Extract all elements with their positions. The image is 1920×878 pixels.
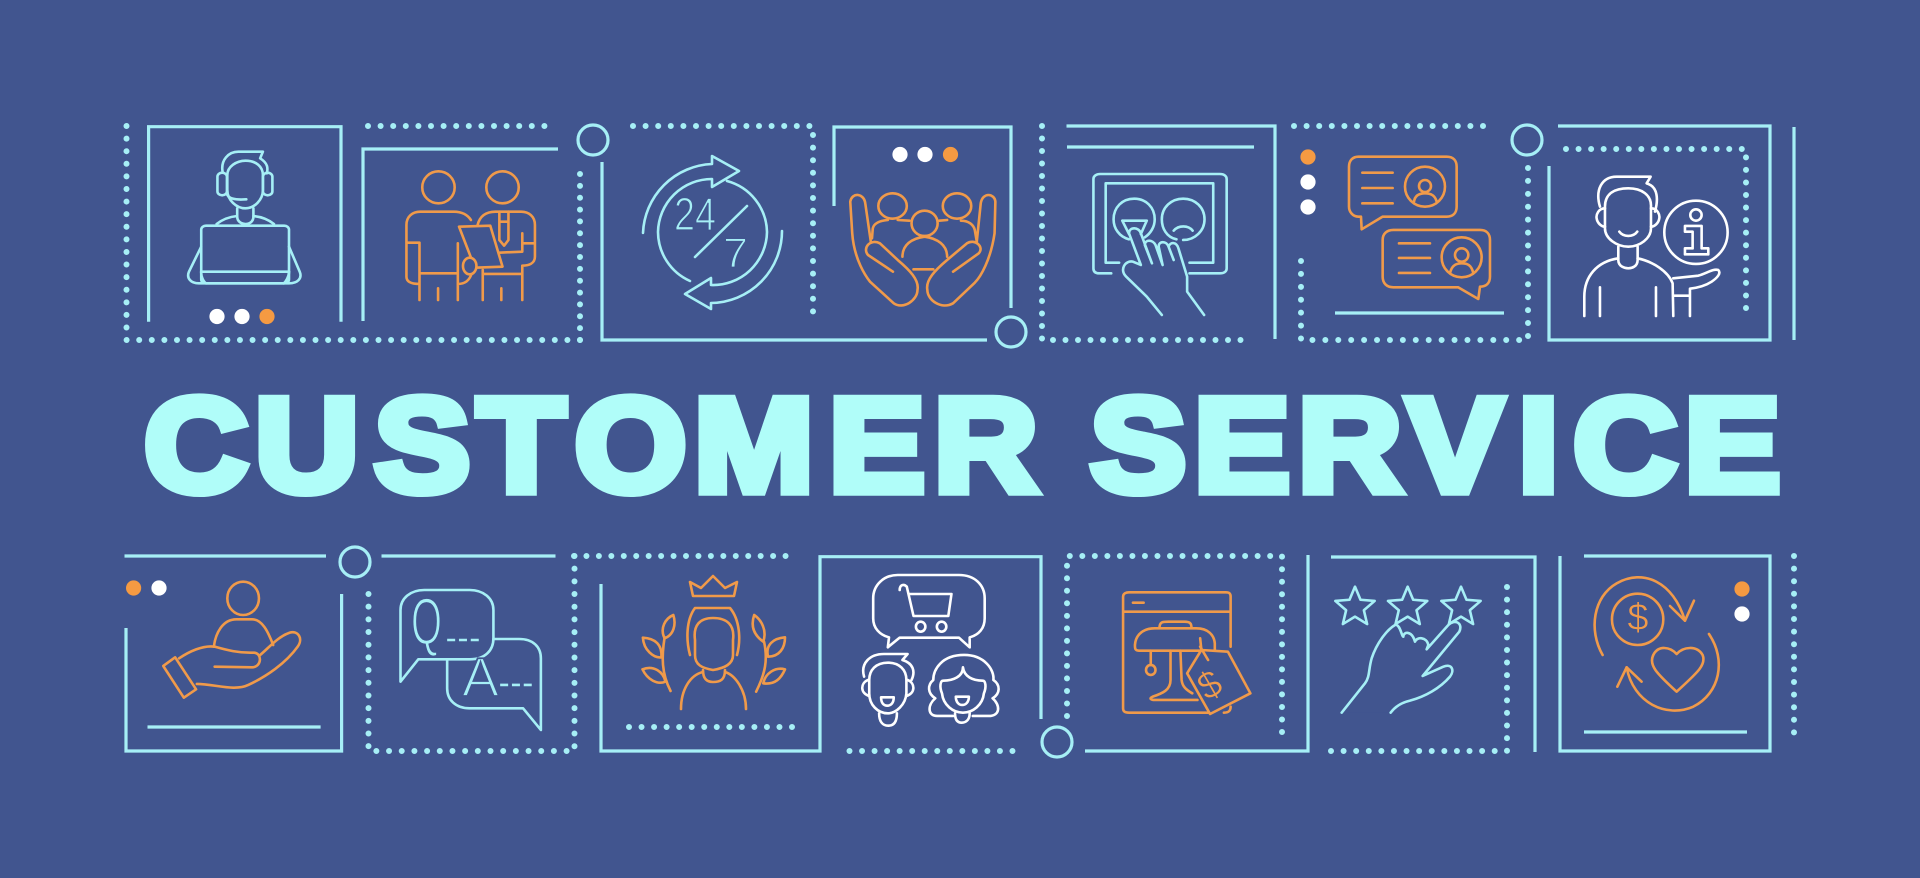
dotted right xyxy=(577,174,583,340)
indicator dots xyxy=(1734,581,1750,622)
dotted inner xyxy=(629,724,792,730)
bottom line xyxy=(1335,311,1504,315)
dotted border xyxy=(1042,126,1253,340)
icon: two people with clipboard xyxy=(406,171,535,300)
dotted bottom xyxy=(850,748,1025,754)
frame xyxy=(1066,126,1275,339)
icon: man with info symbol xyxy=(1584,177,1728,316)
indicator dots xyxy=(892,147,958,162)
icon: hand picking stars xyxy=(1335,587,1481,713)
circle node xyxy=(1512,125,1542,155)
circle node xyxy=(578,125,608,155)
icon: agent with headset and laptop xyxy=(188,152,300,283)
dotted border xyxy=(126,126,580,340)
panel: 24/7 support xyxy=(602,126,987,340)
icon: 24/7 arrows xyxy=(643,156,782,309)
panel: information xyxy=(1549,126,1770,340)
panel: consultation xyxy=(363,126,580,340)
dotted border xyxy=(633,126,813,324)
panel: chat profiles xyxy=(1294,126,1528,340)
title: CUSTOMER SERVICE xyxy=(144,372,1780,520)
inner line xyxy=(1067,145,1254,149)
inner line xyxy=(1584,730,1747,734)
panel: product pricing xyxy=(1067,555,1308,751)
icon: hand holding person xyxy=(163,582,300,698)
indicator dots xyxy=(126,580,167,596)
panel: customer is king xyxy=(574,556,1041,751)
inner line xyxy=(148,725,321,729)
panel: customer care xyxy=(124,556,342,751)
frame xyxy=(602,162,987,340)
dotted top xyxy=(1294,123,1483,129)
dotted inner border xyxy=(1566,149,1746,308)
dotted top xyxy=(368,123,557,129)
frame xyxy=(1560,556,1770,751)
dotted border xyxy=(368,556,574,751)
label: Q: Q xyxy=(411,584,442,658)
frame xyxy=(834,127,1011,308)
icon: money and heart cycle xyxy=(1595,577,1719,711)
panel: star rating xyxy=(1331,557,1535,752)
panel: community care xyxy=(834,127,1011,308)
label: A: A xyxy=(462,646,499,708)
circle node xyxy=(996,317,1026,347)
icon: lamp in browser with price tag xyxy=(1123,592,1250,714)
icon: customers with cart bubble xyxy=(862,575,999,726)
right edge line xyxy=(1792,127,1796,340)
dotted top xyxy=(574,553,798,559)
circle node xyxy=(340,547,370,577)
label: 24: 24 xyxy=(674,188,716,240)
dotted frame xyxy=(1301,168,1528,340)
icon: Q and A bubbles xyxy=(401,590,541,730)
frame xyxy=(124,556,342,751)
panel: support agent xyxy=(126,126,580,340)
dotted border xyxy=(1067,556,1282,732)
dotted right edge xyxy=(1791,556,1797,745)
frame xyxy=(363,149,558,321)
frame xyxy=(1085,555,1308,751)
panel: questions and answers xyxy=(368,556,574,751)
dotted border xyxy=(1331,587,1507,751)
indicator dots xyxy=(1300,149,1316,215)
label: dollar sign on tag: $ xyxy=(1190,662,1230,709)
icon: crowned person with laurels xyxy=(642,576,785,709)
frame xyxy=(1331,557,1535,752)
icon: tablet with faces and hand xyxy=(1093,174,1227,315)
label: 7: 7 xyxy=(723,229,748,276)
frame xyxy=(149,127,341,322)
frame xyxy=(1549,126,1770,340)
icon: hands holding group xyxy=(850,193,995,305)
panel: value and loyalty xyxy=(1560,556,1770,751)
circle node xyxy=(1042,727,1072,757)
panel: feedback rating xyxy=(1042,126,1275,340)
frame xyxy=(601,557,1041,751)
top line xyxy=(382,554,556,558)
label: dollar sign in coin: $ xyxy=(1627,597,1649,639)
panel: shopping conversation xyxy=(850,575,1025,751)
indicator dots xyxy=(209,309,275,324)
icon: two profile speech bubbles xyxy=(1349,157,1490,299)
